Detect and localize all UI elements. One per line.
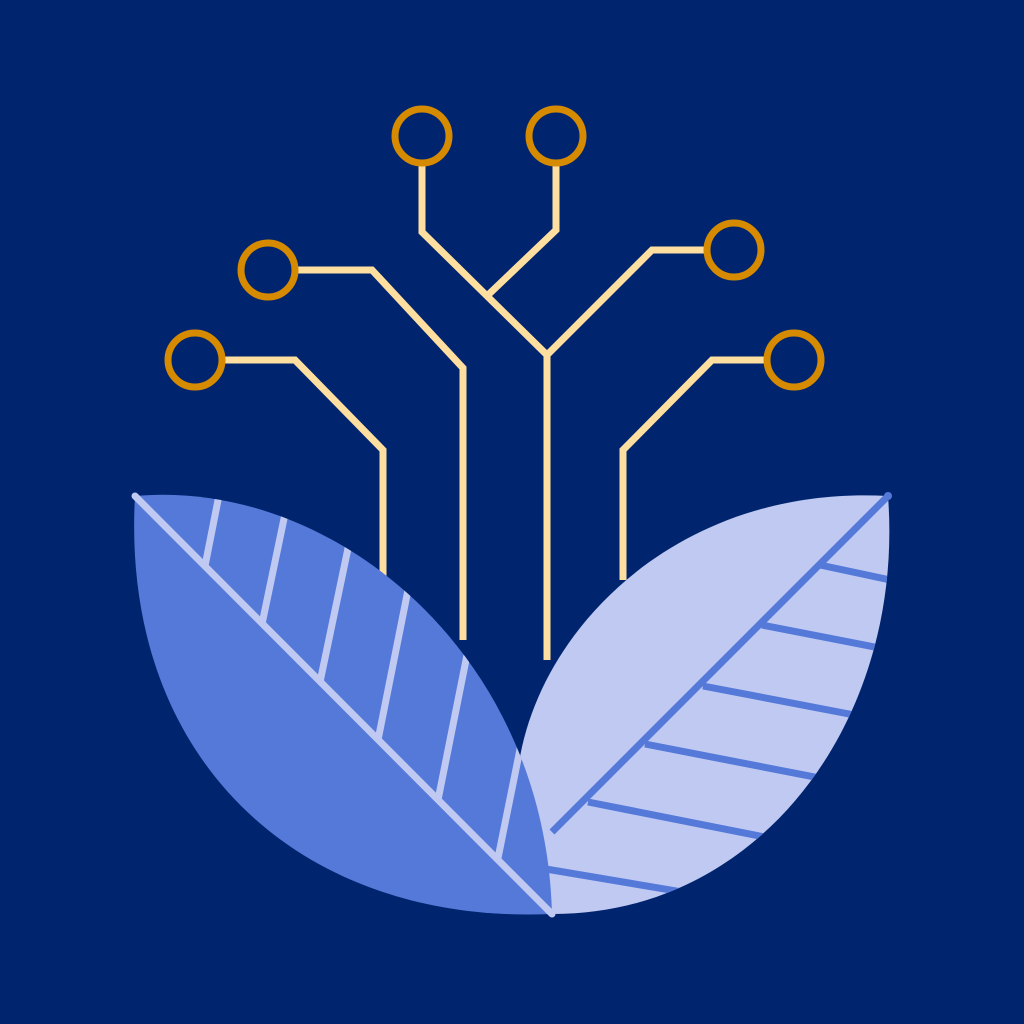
circuit traces — [225, 166, 764, 660]
illustration: circuit plant — [132, 106, 892, 918]
circuit nodes — [168, 109, 821, 387]
right leaf — [516, 492, 900, 914]
left leaf — [134, 480, 552, 915]
